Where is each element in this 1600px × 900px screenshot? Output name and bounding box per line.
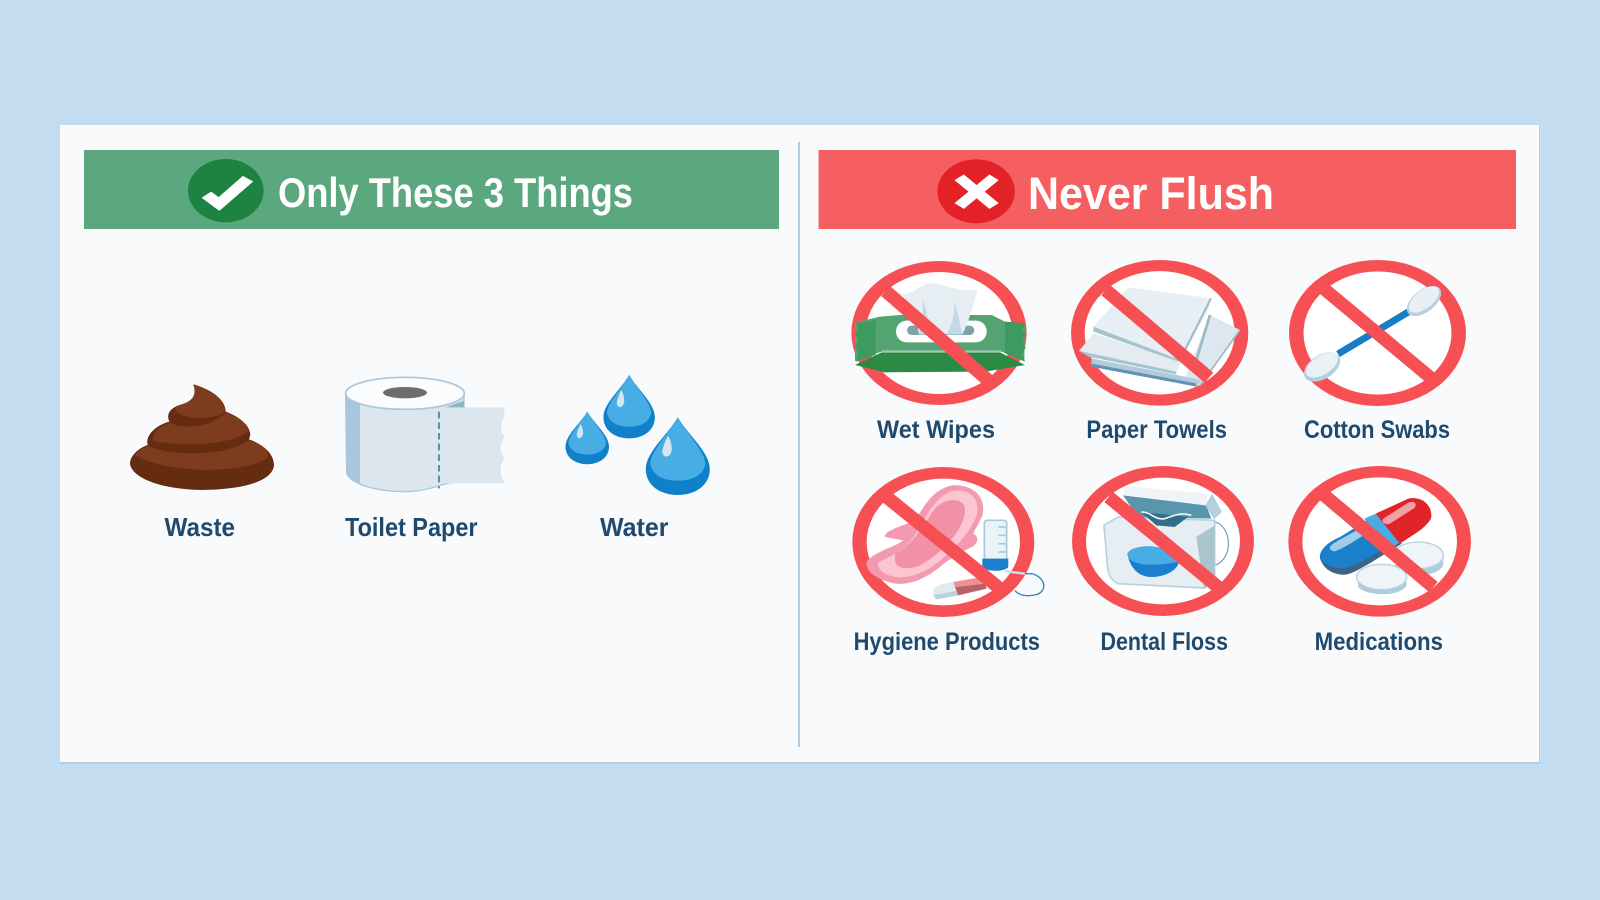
icon: paper towels <box>1071 260 1248 406</box>
icon: water drops <box>566 375 710 495</box>
label: water: Water <box>600 512 668 542</box>
icon: wet wipes <box>851 261 1027 405</box>
icon: hygiene products <box>852 467 1044 617</box>
heading: never flush: Never Flush <box>1028 168 1274 219</box>
label: medications: Medications <box>1315 628 1443 656</box>
label: toilet paper: Toilet Paper <box>345 512 478 542</box>
panel: red header <box>818 150 1516 229</box>
heading: only these 3 things: Only These 3 Things <box>278 169 633 216</box>
label: wet wipes: Wet Wipes <box>877 416 995 444</box>
icon: toilet paper <box>346 377 505 492</box>
label: cotton swabs: Cotton Swabs <box>1304 416 1450 444</box>
panel: green header <box>84 150 779 229</box>
panel: allowed items <box>130 375 710 542</box>
panel: white card <box>60 125 1540 764</box>
icon: medications <box>1288 466 1471 617</box>
icon: check badge <box>188 159 264 222</box>
panel: prohibited items <box>851 260 1471 656</box>
icon: cotton swabs <box>1289 260 1466 406</box>
label: paper towels: Paper Towels <box>1086 416 1227 444</box>
icon: waste <box>130 384 274 490</box>
icon: x badge <box>937 159 1015 223</box>
label: waste: Waste <box>164 512 235 542</box>
icon: dental floss <box>1072 466 1254 616</box>
label: hygiene products: Hygiene Products <box>854 628 1040 656</box>
label: dental floss: Dental Floss <box>1100 628 1228 656</box>
